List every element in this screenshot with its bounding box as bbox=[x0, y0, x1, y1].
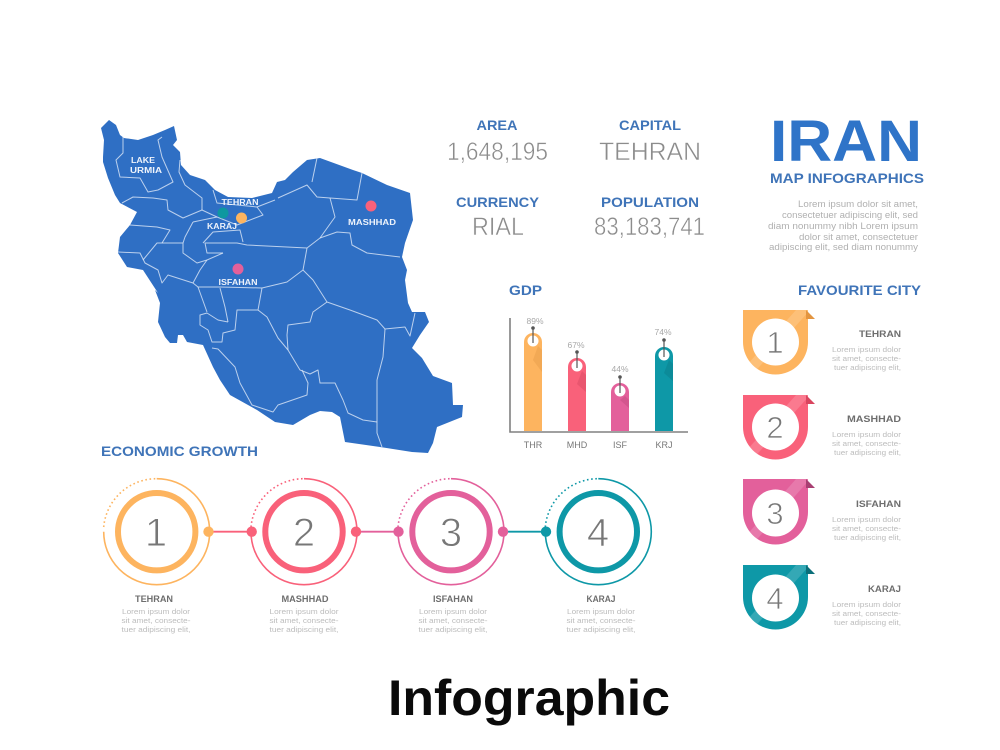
step 3: Isfahan: Lorem ipsum dolor bbox=[419, 607, 488, 616]
rank 3: Isfahan: sit amet, consecte- bbox=[832, 524, 902, 533]
rank 3: Isfahan bbox=[738, 479, 902, 545]
marker: Mashhad bbox=[366, 200, 376, 212]
marker: Isfahan bbox=[232, 264, 244, 274]
map labels bbox=[130, 156, 396, 287]
step 4: Karaj: tuer adipiscing elit, bbox=[566, 625, 636, 634]
title: Iran: IRAN bbox=[770, 109, 922, 174]
fact: area bbox=[447, 117, 548, 166]
rank 2: Mashhad bbox=[738, 395, 902, 460]
step 1: Tehran: Lorem ipsum dolor bbox=[122, 607, 191, 616]
map labels: LAKE bbox=[131, 156, 156, 165]
step 2: Mashhad: sit amet, consecte- bbox=[270, 616, 339, 625]
rank 4: Karaj: Lorem ipsum dolor bbox=[832, 600, 902, 609]
bar: KRJ 74% bbox=[654, 327, 673, 450]
title block bbox=[768, 109, 924, 252]
marker: Karaj bbox=[218, 208, 228, 218]
map labels: ISFAHAN bbox=[218, 278, 258, 287]
fact: population: 83,183,741 bbox=[594, 213, 705, 241]
step 1: Tehran: sit amet, consecte- bbox=[122, 616, 191, 625]
panel: economic growth bbox=[101, 443, 651, 634]
bar: MHD 67% bbox=[567, 340, 588, 450]
rank 3: Isfahan: Lorem ipsum dolor bbox=[832, 515, 902, 524]
map labels: MASHHAD bbox=[348, 218, 396, 227]
fact: currency: CURRENCY bbox=[456, 194, 540, 210]
heading: GDP: GDP bbox=[509, 282, 542, 298]
rank 3: Isfahan: tuer adipiscing elit, bbox=[834, 533, 901, 542]
rank 1: Tehran: sit amet, consecte- bbox=[832, 354, 902, 363]
rank 3: Isfahan: 3 bbox=[766, 496, 784, 531]
heading: economic growth: ECONOMIC GROWTH bbox=[101, 443, 258, 459]
panel: Iran map bbox=[101, 120, 463, 453]
rank 1: Tehran bbox=[738, 310, 902, 375]
step 1: Tehran: 1 bbox=[145, 511, 167, 555]
fact: currency bbox=[456, 194, 540, 241]
fact: population bbox=[594, 194, 705, 241]
map shape bbox=[101, 120, 463, 453]
bar: THR 89% bbox=[524, 316, 544, 450]
map labels: URMIA bbox=[130, 166, 162, 175]
connectors bbox=[209, 531, 546, 533]
bar: MHD 67%: 67% bbox=[567, 340, 585, 350]
rank 2: Mashhad: Lorem ipsum dolor bbox=[832, 430, 902, 439]
fact: capital bbox=[599, 117, 701, 166]
rank 1: Tehran: tuer adipiscing elit, bbox=[834, 363, 901, 372]
rank 4: Karaj bbox=[738, 565, 902, 630]
fact: population: POPULATION bbox=[601, 194, 699, 210]
fact: capital: CAPITAL bbox=[619, 117, 681, 133]
bar: THR 89%: 89% bbox=[526, 316, 544, 326]
intro text: diam nonummy nibh Lorem ipsum bbox=[768, 221, 918, 231]
step 3: Isfahan: 3 bbox=[440, 511, 462, 555]
intro text: adipiscing elit, sed diam nonummy bbox=[769, 242, 919, 252]
intro text: dolor sit amet, consectetuer bbox=[799, 232, 918, 242]
fact: area: 1,648,195 bbox=[447, 138, 548, 166]
fact: capital: TEHRAN bbox=[599, 138, 701, 166]
chart axes bbox=[510, 318, 688, 432]
rank 1: Tehran: TEHRAN bbox=[859, 329, 901, 339]
step 4: Karaj: Lorem ipsum dolor bbox=[567, 607, 636, 616]
fact: currency: RIAL bbox=[472, 213, 524, 241]
rank 1: Tehran: 1 bbox=[766, 325, 784, 360]
bar: ISF 44% bbox=[611, 364, 629, 450]
bar: ISF 44%: 44% bbox=[611, 364, 629, 374]
step 3: Isfahan: tuer adipiscing elit, bbox=[418, 625, 488, 634]
intro text bbox=[768, 199, 919, 252]
step 3: Isfahan: ISFAHAN bbox=[433, 594, 473, 604]
step 1: Tehran: TEHRAN bbox=[135, 594, 173, 604]
bar: KRJ 74%: 74% bbox=[654, 327, 672, 337]
step 2: Mashhad: Lorem ipsum dolor bbox=[270, 607, 339, 616]
bar: ISF 44%: ISF bbox=[613, 440, 627, 450]
rank 4: Karaj: sit amet, consecte- bbox=[832, 609, 902, 618]
fact: area: AREA bbox=[476, 117, 518, 133]
step 2: Mashhad: 2 bbox=[293, 511, 315, 555]
heading: favourite city: FAVOURITE CITY bbox=[798, 282, 922, 298]
step 3: Isfahan: sit amet, consecte- bbox=[418, 616, 488, 625]
caption: Infographic: Infographic bbox=[388, 670, 670, 726]
rank 4: Karaj: 4 bbox=[766, 581, 784, 616]
step 2: Mashhad: tuer adipiscing elit, bbox=[270, 625, 338, 634]
step 1: Tehran bbox=[104, 479, 214, 634]
step 4: Karaj bbox=[541, 479, 651, 634]
step 4: Karaj: sit amet, consecte- bbox=[566, 616, 636, 625]
rank 4: Karaj: tuer adipiscing elit, bbox=[834, 618, 901, 627]
bar: MHD 67%: MHD bbox=[567, 440, 588, 450]
rank 2: Mashhad: MASHHAD bbox=[847, 414, 902, 424]
rank 2: Mashhad: sit amet, consecte- bbox=[832, 439, 902, 448]
intro text: Lorem ipsum dolor sit amet, bbox=[798, 199, 918, 209]
step 1: Tehran: tuer adipiscing elit, bbox=[122, 625, 190, 634]
step 2: Mashhad bbox=[246, 479, 361, 634]
intro text: consectetuer adipiscing elit, sed bbox=[782, 210, 918, 220]
rank 2: Mashhad: tuer adipiscing elit, bbox=[834, 448, 901, 457]
panel: key facts bbox=[447, 117, 705, 241]
marker: Tehran bbox=[236, 212, 247, 224]
bar: THR 89%: THR bbox=[524, 440, 543, 450]
map labels: KARAJ bbox=[207, 222, 237, 231]
panel: favourite city bbox=[738, 282, 922, 630]
bar: KRJ 74%: KRJ bbox=[655, 440, 673, 450]
rank 4: Karaj: KARAJ bbox=[868, 584, 901, 594]
map labels: TEHRAN bbox=[222, 198, 259, 207]
step 2: Mashhad: MASHHAD bbox=[282, 594, 329, 604]
step 4: Karaj: KARAJ bbox=[586, 594, 616, 604]
panel: GDP chart bbox=[509, 282, 688, 450]
step 3: Isfahan bbox=[393, 479, 508, 634]
rank 1: Tehran: Lorem ipsum dolor bbox=[832, 345, 902, 354]
infographic canvas bbox=[101, 120, 924, 726]
rank 3: Isfahan: ISFAHAN bbox=[856, 499, 901, 509]
rank 2: Mashhad: 2 bbox=[766, 410, 784, 445]
step 4: Karaj: 4 bbox=[587, 511, 609, 555]
subtitle: MAP INFOGRAPHICS bbox=[770, 170, 924, 186]
